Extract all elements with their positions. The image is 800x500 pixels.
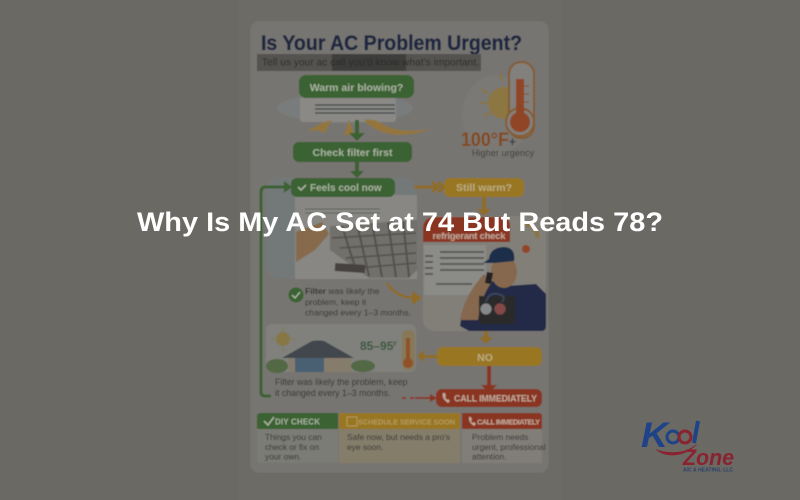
legend: DIY check [257, 413, 338, 463]
panel: infographic card [250, 21, 549, 473]
infographic title: Is Your AC Problem Urgent? [261, 31, 522, 55]
subtitle with dark highlight: Tell us your ac call you'd know what's important. [262, 58, 479, 68]
arrow: yellow curve [387, 283, 422, 305]
button: call immediately [436, 389, 542, 407]
label: 85-95F: F [393, 342, 397, 348]
illustration: technician with gauges [423, 216, 546, 331]
main heading: Why Is My AC Set at 74 But Reads 78? [137, 207, 663, 237]
button: still warm: Still warm? [456, 182, 512, 194]
legend: DIY check: DIY CHECK [275, 418, 320, 426]
logo: Kool Zone: Zone [682, 445, 734, 470]
button: feels cool now [291, 178, 395, 197]
text: filter likely problem: changed every 1–3 months. [305, 308, 411, 318]
text: filter likely problem second: Filter was likely the problem, keep [275, 377, 408, 387]
text: filter likely problem: Filter was likely the [305, 286, 380, 296]
legend: schedule service soon: eye soon. [347, 442, 383, 452]
illustration: house with sun [266, 324, 416, 373]
arrow: NO to house [417, 350, 437, 362]
button: check filter first: Check filter first [313, 147, 393, 159]
legend: DIY check: check or fix on [265, 442, 319, 452]
arrow: down to feels cool [350, 162, 364, 178]
button: call immediately: CALL IMMEDIATELY [454, 394, 537, 404]
button: NO [437, 347, 542, 366]
arrow: to still warm [414, 182, 444, 192]
icon: small thermometer [402, 330, 415, 370]
label: 85-95F: 85–95 [360, 339, 393, 353]
logo: Kool Zone: K [641, 416, 671, 455]
button: check filter first [293, 142, 412, 162]
icon: sun partial right [522, 224, 538, 253]
arrow: NO to call [481, 366, 497, 393]
label: higher urgency: Higher urgency [472, 148, 535, 158]
text: filter likely problem: problem, keep it [305, 297, 367, 307]
button: warm air blowing: Warm air blowing? [310, 82, 403, 94]
arrow: green loop back [261, 187, 288, 396]
legend: call immediately: CALL IMMEDIATELY [477, 418, 540, 426]
illustration: thermometer and sun [462, 62, 534, 155]
legend: schedule service soon [339, 413, 460, 463]
button: still warm [444, 178, 524, 197]
legend: call immediately: attention. [472, 452, 506, 462]
button: warm air blowing [299, 75, 414, 98]
label: 100F plus: 100°F+ [461, 130, 516, 151]
background strip [238, 0, 562, 500]
arrow: to refrigerant check [477, 197, 491, 216]
illustration: filter photo [266, 178, 417, 279]
check icon [288, 288, 304, 302]
legend: schedule service soon: Safe now, but needs a pro's [347, 432, 450, 442]
button: refrigerant check: refrigerant check [432, 231, 506, 242]
illustration: AC unit with warm air [277, 93, 432, 135]
subtitle with dark highlight [257, 54, 481, 71]
legend: call immediately: urgent, professional [472, 442, 546, 452]
legend: DIY check: your own. [265, 452, 301, 462]
arrow: down to check filter [349, 120, 365, 141]
legend: DIY check: Things you can [265, 432, 322, 442]
text: filter likely problem second: it changed every 1–3 months. [275, 388, 390, 398]
arrow: dashed to call [402, 394, 437, 402]
logo: Kool Zone: A/C & HEATING, LLC [683, 468, 733, 474]
legend: call immediately [462, 413, 546, 463]
button: feels cool now: Feels cool now [310, 183, 382, 194]
button: NO: NO [477, 352, 493, 364]
arrow: to NO [479, 331, 493, 344]
legend: call immediately: Problem needs [472, 432, 528, 442]
logo: Kool Zone [641, 416, 734, 474]
legend: schedule service soon: SCHEDULE SERVICE SOON [358, 418, 455, 426]
button: refrigerant check [423, 217, 510, 242]
